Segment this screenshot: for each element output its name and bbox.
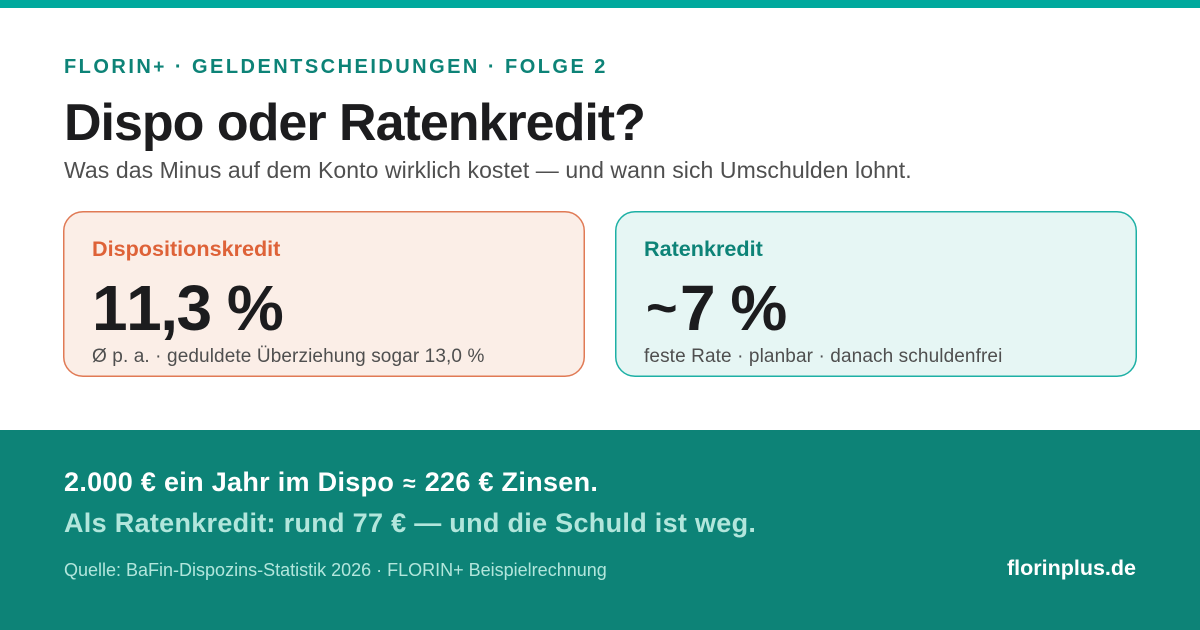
panel: footer band xyxy=(0,430,1200,630)
value: ~7 %: ~7 % xyxy=(646,272,786,344)
subtitle: Was das Minus auf dem Konto wirklich kostet — und wann sich Umschulden lohnt. xyxy=(64,157,912,183)
source: Quelle: BaFin-Dispozins-Statistik 2026 · FLORIN+ Beispielrechnung xyxy=(64,560,607,580)
takeaway line 1: 2.000 € ein Jahr im Dispo ≈ 226 € Zinsen. xyxy=(64,467,598,497)
value: 11,3 %: 11,3 % xyxy=(92,272,282,344)
takeaway line 2: Als Ratenkredit: rund 77 € — und die Schuld ist weg. xyxy=(64,508,756,538)
card label: Ratenkredit: Ratenkredit xyxy=(644,236,763,261)
top accent bar xyxy=(0,0,1200,8)
panel: Dispositionskredit xyxy=(63,211,585,377)
eyebrow: FLORIN+ · GELDENTSCHEIDUNGEN · FOLGE 2 xyxy=(64,56,608,78)
note: Dispositionskredit: Ø p. a. · geduldete Überziehung sogar 13,0 % xyxy=(92,346,484,367)
note: Ratenkredit: feste Rate · planbar · danach schuldenfrei xyxy=(644,346,1002,367)
title: Dispo oder Ratenkredit? xyxy=(64,94,645,152)
card label: Dispositionskredit: Dispositionskredit xyxy=(92,236,280,261)
panel: Ratenkredit xyxy=(615,211,1137,377)
website: florinplus.de xyxy=(1007,556,1136,580)
